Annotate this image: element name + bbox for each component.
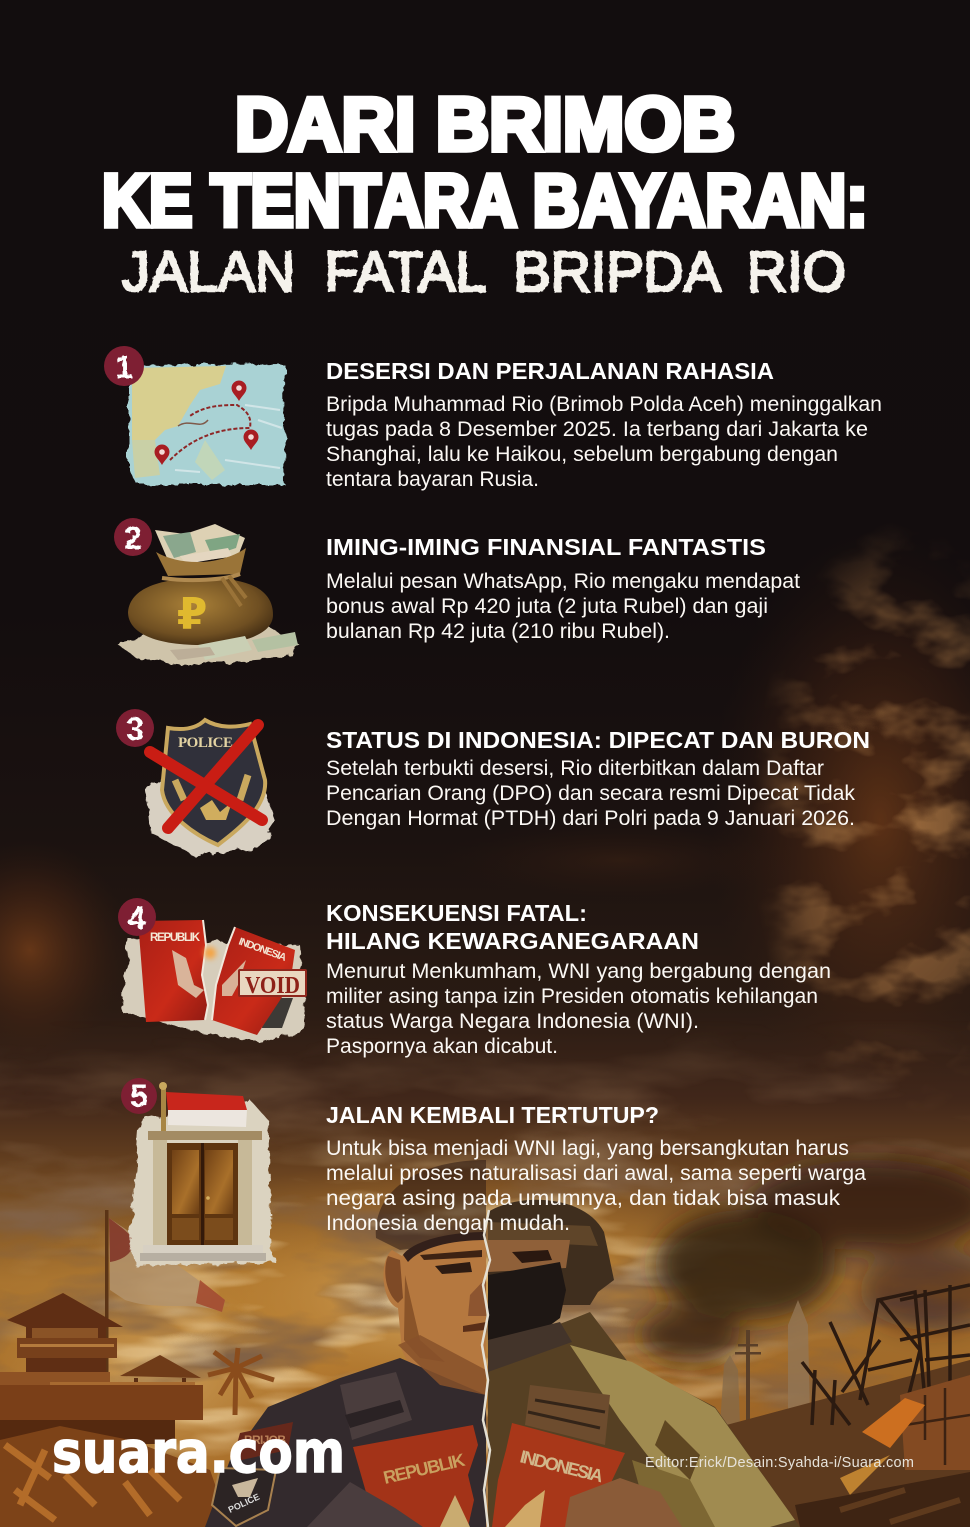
number badge 5: 5 [130, 1078, 148, 1114]
icon: door with flag [130, 1082, 275, 1266]
left half: police officer: POLICE [227, 1492, 261, 1515]
passport REPUBLIK: REPUBLIK [381, 1450, 467, 1488]
bottom left: Indonesian flag on pole [105, 1210, 225, 1510]
text block 1: Shanghai, lalu ke Haikou, sebelum bergabung dengan [326, 443, 838, 466]
soldier illustration: half police officer, half mercenary [205, 1160, 800, 1527]
text block 4: status Warga Negara Indonesia (WNI). [326, 1010, 699, 1033]
text block 1 [326, 393, 882, 491]
section 3: dismissed [116, 709, 870, 856]
police gloved hand [307, 1482, 423, 1527]
text block 2: bulanan Rp 42 juta (210 ribu Rubel). [326, 620, 670, 643]
icon: torn passport with VOID stamp [122, 920, 306, 1043]
section 2: financial lure [114, 518, 800, 665]
heading 4: KONSEKUENSI FATAL: [326, 900, 587, 926]
text block 2: Melalui pesan WhatsApp, Rio mengaku mendapat [326, 570, 800, 593]
title line 2: KE TENTARA BAYARAN: [102, 159, 868, 242]
icon: map pin Jakarta [154, 445, 170, 465]
heading 5: JALAN KEMBALI TERTUTUP? [326, 1102, 659, 1128]
icon: crossed-out police badge: POLICE [178, 735, 233, 751]
door [167, 1143, 238, 1245]
number badge 4: 4 [128, 900, 146, 936]
number badge 2 [114, 518, 152, 556]
torn seam [482, 1210, 490, 1527]
passport INDONESIA: INDONESIA [518, 1446, 605, 1486]
door frame [148, 1131, 262, 1245]
text block 1: tugas pada 8 Desember 2025. Ia terbang dari Jakarta ke [326, 418, 868, 441]
text block 4: militer asing tanpa izin Presiden otomatis kehilangan [326, 985, 818, 1008]
icon: map pin Haikou [244, 430, 258, 450]
icon: map pin Shanghai [232, 381, 246, 401]
icon: palm tree [208, 1348, 274, 1415]
section 1: desertion [104, 346, 882, 491]
background: burning sky [0, 533, 970, 1527]
icon: torn passport with VOID stamp: INDONESIA [237, 936, 288, 964]
right half: mercenary in camouflage [488, 1200, 800, 1527]
text block 4 [326, 960, 831, 1058]
left half: police officer [205, 1160, 486, 1527]
text block 3: Dengan Hormat (PTDH) dari Polri pada 9 Januari 2026. [326, 807, 855, 830]
text block 2: bonus awal Rp 420 juta (2 juta Rubel) dan gaji [326, 595, 768, 618]
credit line: Editor:Erick/Desain:Syahda-i/Suara.com [645, 1455, 914, 1471]
text block 4: Menurut Menkumham, WNI yang bergabung dengan [326, 960, 831, 983]
flag [159, 1082, 247, 1132]
bottom left: village buildings [0, 1293, 274, 1527]
section 4: citizenship lost [118, 898, 831, 1058]
subtitle: JALAN FATAL BRIPDA RIO [122, 240, 846, 304]
icon: money bag: ₽ [177, 589, 207, 640]
number badge 1: 1 [115, 349, 133, 385]
heading 2: IMING-IMING FINANSIAL FANTASTIS [326, 534, 766, 560]
steps [140, 1245, 266, 1261]
icon: money bag [116, 524, 300, 665]
text block 4: Paspornya akan dicabut. [326, 1035, 558, 1058]
heading 4 [326, 900, 699, 954]
text block 5 [326, 1137, 866, 1235]
text block 1: tentara bayaran Rusia. [326, 468, 539, 491]
heading 4: HILANG KEWARGANEGARAAN [326, 928, 699, 954]
text block 5: negara asing pada umumnya, dan tidak bisa masuk [326, 1187, 841, 1210]
section 5: the way back closed [121, 1078, 866, 1266]
logo: suara.com: suara.com [52, 1418, 345, 1486]
text block 3: Setelah terbukti desersi, Rio diterbitkan dalam Daftar [326, 757, 824, 780]
icon: map with route [128, 364, 285, 485]
passport REPUBLIK [353, 1425, 478, 1527]
number badge 2: 2 [124, 520, 142, 556]
text block 1: Bripda Muhammad Rio (Brimob Polda Aceh) meninggalkan [326, 393, 882, 416]
text block 3 [326, 757, 855, 830]
text block 5: melalui proses naturalisasi dari awal, sama seperti warga [326, 1162, 866, 1185]
number badge 3 [116, 709, 154, 747]
bottom right: ruined city and smoke [700, 1285, 970, 1527]
VOID stamp: VOID [245, 973, 300, 999]
smoke, top right [640, 1160, 970, 1363]
left half: police officer: BRIJOB [244, 1433, 286, 1447]
number badge 3: 3 [126, 711, 144, 747]
number badge 1 [104, 346, 144, 386]
heading 1: DESERSI DAN PERJALANAN RAHASIA [326, 358, 774, 384]
text block 5: Indonesia dengan mudah. [326, 1212, 570, 1235]
number badge 4 [118, 898, 156, 936]
passport INDONESIA [492, 1423, 625, 1527]
heading 3: STATUS DI INDONESIA: DIPECAT DAN BURON [326, 727, 870, 753]
icon: torn passport with VOID stamp: REPUBLIK [150, 932, 201, 944]
title line 1: DARI BRIMOB [235, 82, 735, 166]
icon: crossed-out police badge [146, 720, 276, 856]
text block 3: Pencarian Orang (DPO) dan secara resmi Dipecat Tidak [326, 782, 855, 805]
title [102, 82, 868, 304]
text block 2 [326, 570, 800, 643]
text block 5: Untuk bisa menjadi WNI lagi, yang bersangkutan harus [326, 1137, 849, 1160]
mercenary hand [565, 1478, 682, 1527]
number badge 5 [121, 1078, 157, 1114]
